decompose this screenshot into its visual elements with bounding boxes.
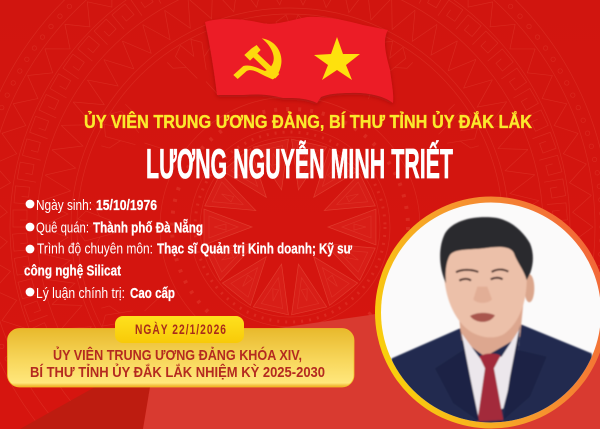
hair	[440, 217, 533, 283]
banner panel	[8, 328, 354, 387]
bullet: political theory	[26, 288, 34, 296]
portrait white backdrop	[381, 202, 600, 422]
text block: biography: công nghệ Silicat	[24, 262, 121, 280]
text block: biography: Lý luận chính trị:	[36, 285, 125, 302]
bullet: birth date	[26, 200, 34, 208]
tie	[477, 354, 503, 422]
text block: biography	[24, 197, 352, 302]
banner text line 1: ỦY VIÊN TRUNG ƯƠNG ĐẢNG KHÓA XIV,	[53, 346, 302, 364]
shirt	[462, 328, 520, 420]
suit	[383, 324, 599, 423]
portrait ring	[375, 196, 600, 428]
heading: position title: ỦY VIÊN TRUNG ƯƠNG ĐẢNG, BÍ THƯ TỈNH ỦY ĐẮK LẮK	[84, 111, 533, 132]
lapels	[435, 325, 547, 422]
date text: NGÀY 22/1/2026	[135, 321, 227, 337]
bullet: hometown	[26, 223, 34, 231]
portrait figure	[383, 217, 599, 423]
icon: hammer and sickle	[233, 38, 281, 79]
portrait	[375, 196, 600, 428]
text block: biography: Trình độ chuyên môn:	[37, 240, 153, 258]
flag cloth	[205, 17, 393, 103]
face	[444, 240, 527, 337]
lighter lower-right band	[143, 272, 600, 429]
text block: biography: 15/10/1976	[96, 197, 157, 214]
icon: star	[314, 37, 360, 80]
text block: biography: Ngày sinh:	[36, 197, 92, 214]
eyebrows and eyes	[456, 269, 508, 281]
text block: biography: Cao cấp	[130, 285, 175, 302]
neck	[457, 303, 523, 357]
text block: biography: Quê quán:	[36, 220, 89, 236]
dark lower-left wedge	[20, 387, 150, 429]
bullet: qualification	[26, 245, 34, 253]
banner text line 2: BÍ THƯ TỈNH ỦY ĐẮK LẮK NHIỆM KỲ 2025-2030	[30, 363, 325, 381]
ear	[524, 274, 534, 302]
callout: appointment banner	[8, 316, 354, 387]
date tab	[115, 316, 244, 343]
mouth	[470, 313, 495, 322]
flag	[205, 17, 393, 103]
text block: biography: Thành phố Đà Nẵng	[93, 220, 203, 236]
text block: biography: Thạc sĩ Quản trị Kinh doanh; Kỹ sư	[157, 240, 352, 258]
nose	[473, 287, 492, 303]
